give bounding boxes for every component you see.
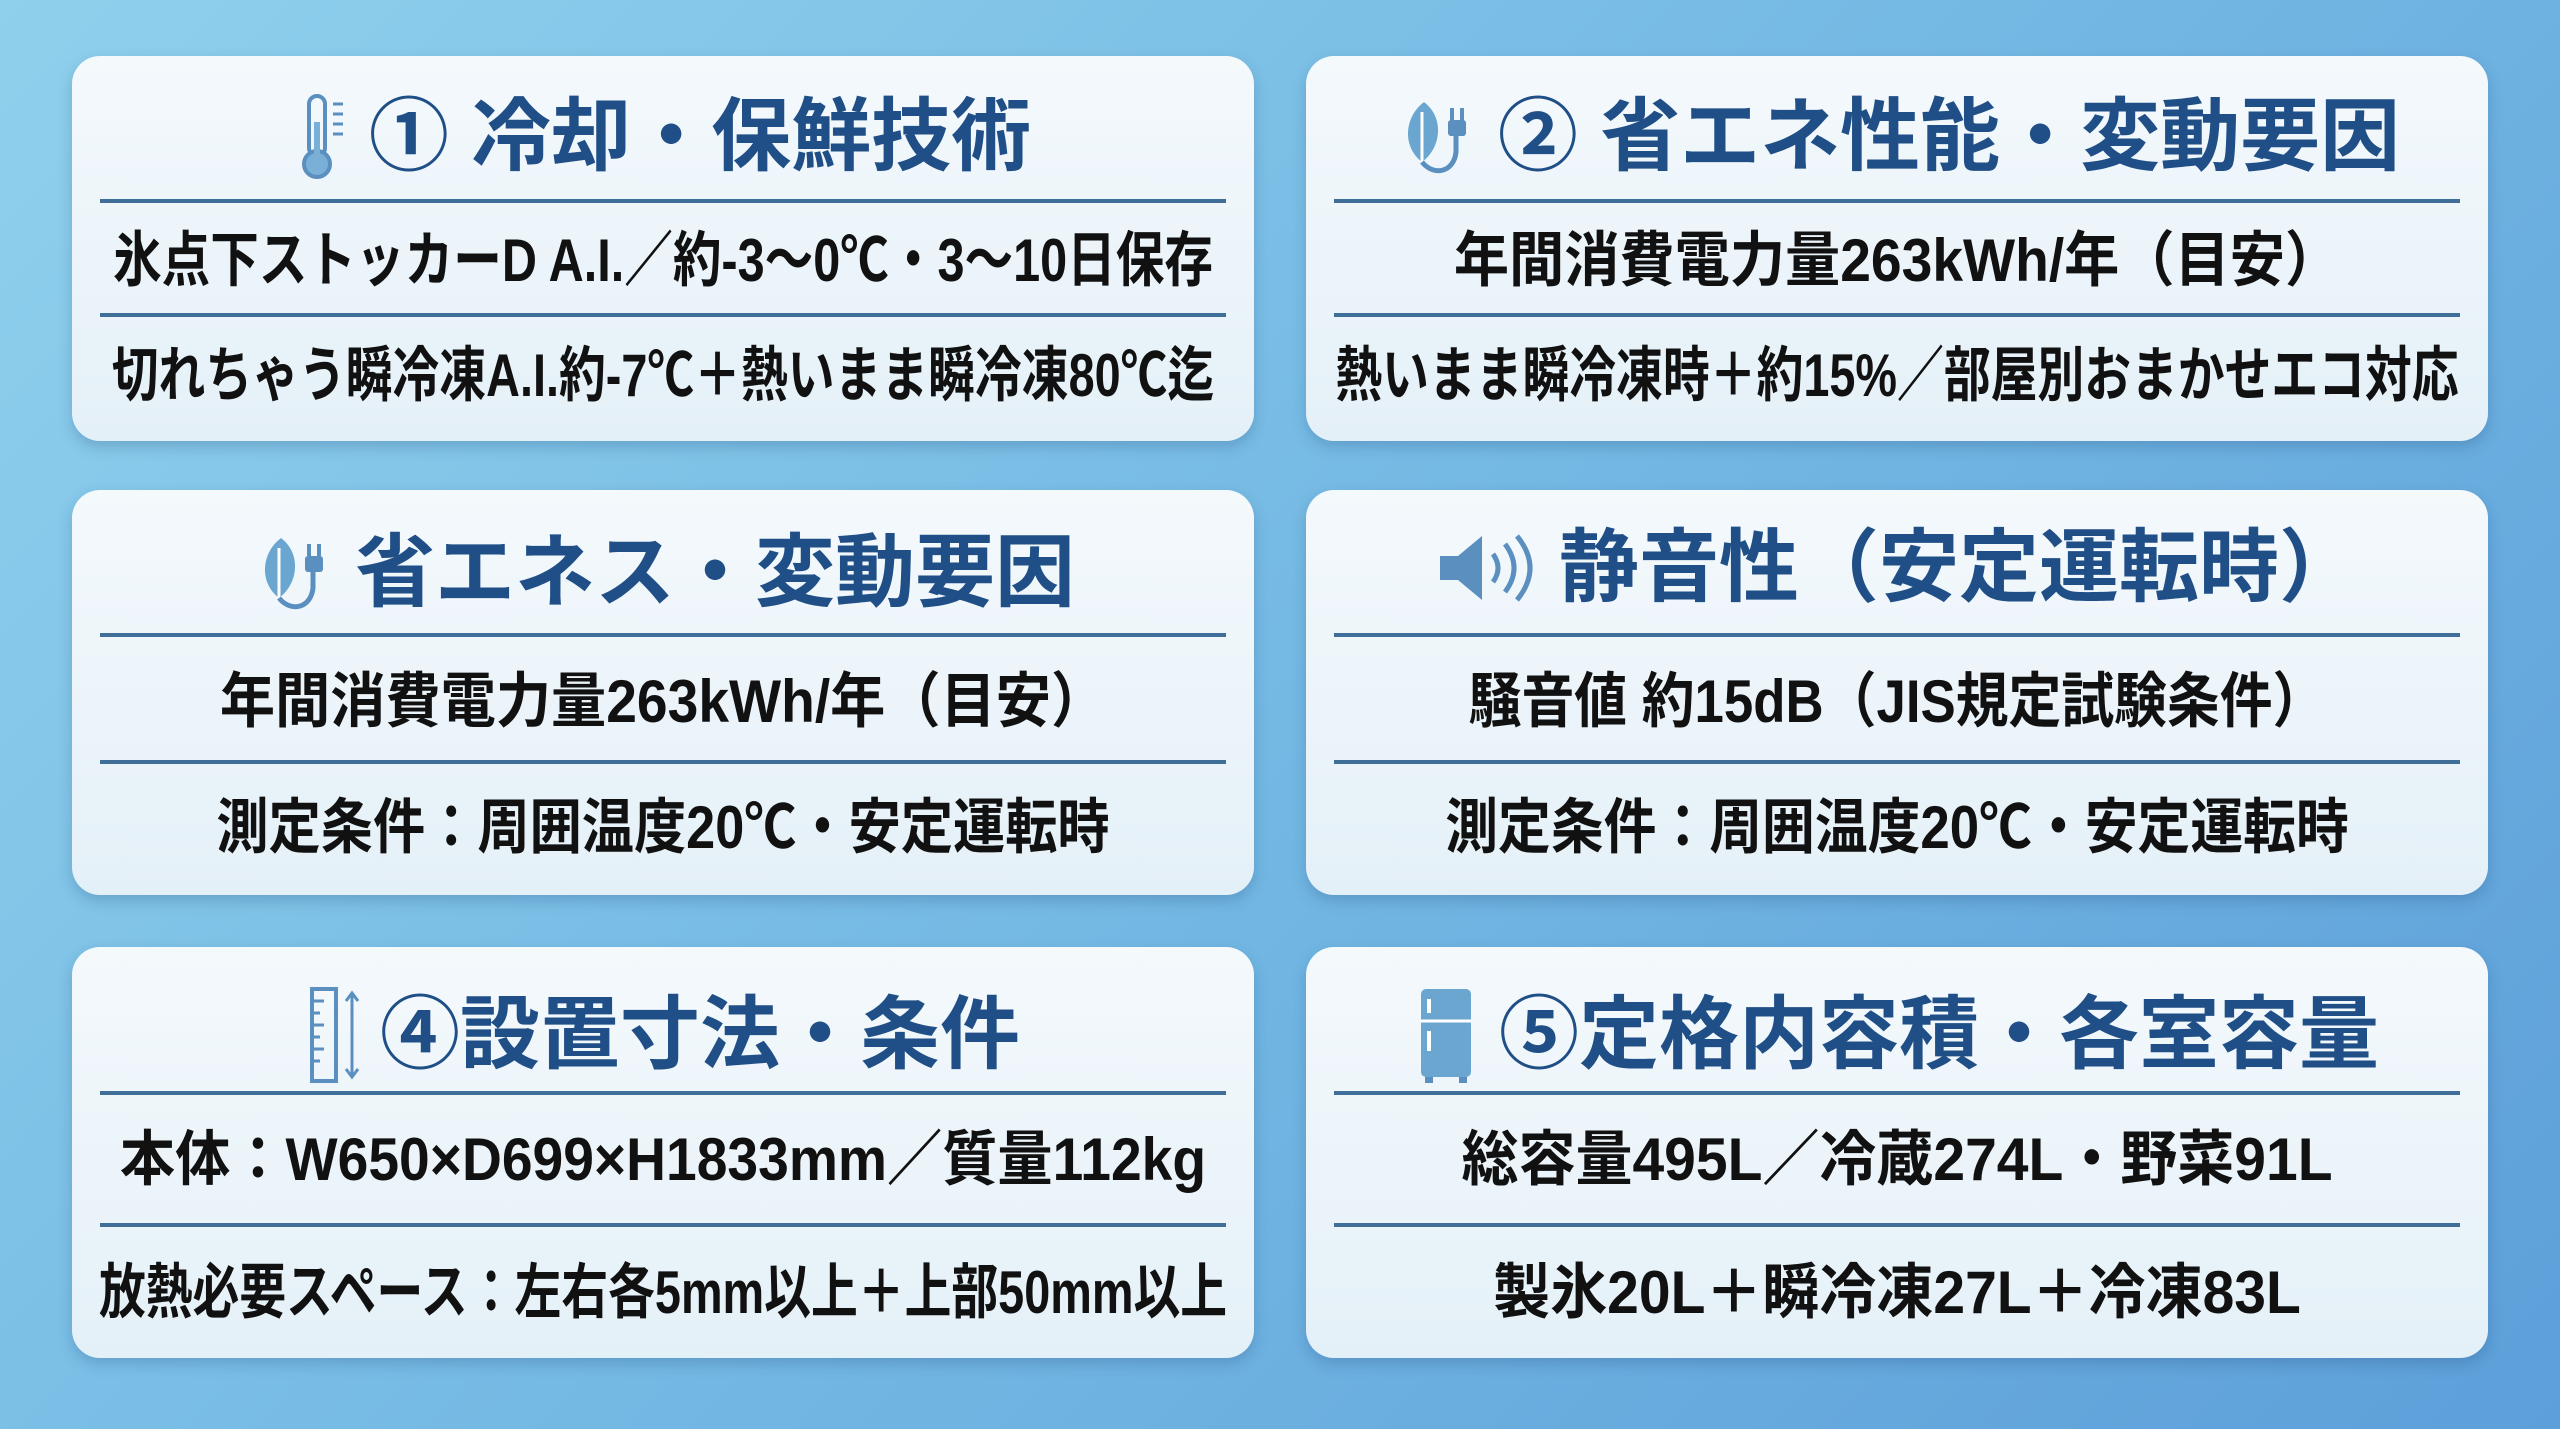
panel: 2 energy — [1306, 56, 2488, 441]
panel: 1 cooling — [72, 56, 1254, 441]
text: dimensions: 本体：W650×D699×H1833mm／質量112kg — [120, 1126, 1206, 1193]
icon: leaf plug — [1408, 102, 1466, 174]
panel: 3 energy factors — [72, 490, 1254, 895]
text: quick freeze: 切れちゃう瞬冷凍A.I.約-7℃＋熱いまま瞬冷凍80℃迄 — [112, 342, 1214, 409]
text: measurement: 測定条件：周囲温度20℃・安定運転時 — [216, 794, 1110, 861]
text: stocker: 氷点下ストッカーD A.I.／約-3〜0℃・3〜10日保存 — [113, 227, 1213, 294]
text: compartments: 製氷20L＋瞬冷凍27L＋冷凍83L — [1493, 1259, 2301, 1326]
panel: 4 installation — [72, 947, 1254, 1358]
heading: installation: ④設置寸法・条件 — [380, 990, 1020, 1079]
icon: fridge — [1421, 989, 1471, 1083]
text: total: 総容量495L／冷蔵274L・野菜91L — [1461, 1126, 2333, 1193]
heading: energy factors: 省エネス・変動要因 — [355, 528, 1075, 617]
icon: ruler — [310, 987, 360, 1083]
text: variation: 熱いまま瞬冷凍時＋約15%／部屋別おまかせエコ対応 — [1335, 342, 2459, 409]
icon: speaker — [1440, 534, 1533, 602]
heading: cooling: ① 冷却・保鮮技術 — [369, 92, 1031, 181]
heading: energy: ② 省エネ性能・変動要因 — [1498, 92, 2400, 181]
icon: leaf plug — [264, 538, 323, 610]
text: spacing: 放熱必要スペース：左右各5mm以上＋上部50mm以上 — [99, 1259, 1227, 1326]
text: noise value: 騒音値 約15dB（JIS規定試験条件） — [1469, 668, 2325, 735]
heading: noise: 静音性（安定運転時） — [1559, 523, 2359, 612]
panel: 5 capacity — [1306, 947, 2488, 1358]
heading: capacity: ⑤定格内容積・各室容量 — [1499, 990, 2379, 1079]
text: measurement: 測定条件：周囲温度20℃・安定運転時 — [1445, 794, 2349, 861]
text: annual power: 年間消費電力量263kWh/年（目安） — [220, 668, 1106, 735]
icon: thermometer — [302, 94, 343, 179]
panel: noise — [1306, 490, 2488, 895]
text: annual power: 年間消費電力量263kWh/年（目安） — [1454, 227, 2340, 294]
